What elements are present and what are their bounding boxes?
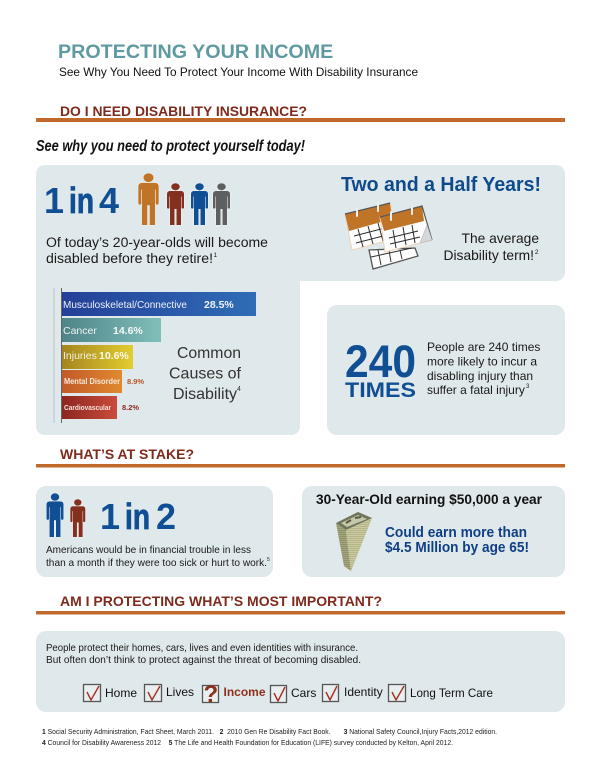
bar: musculoskeletal: Musculoskeletal/Connective — [63, 299, 187, 311]
heading: 30-year-old earning: 30-Year-Old earning $50,000 a year — [316, 491, 543, 507]
panel: what is most important — [36, 631, 565, 712]
check: identity — [322, 684, 383, 702]
title: PROTECTING YOUR INCOME — [58, 41, 333, 63]
check: home — [84, 684, 137, 702]
text: 240 times description: disabling injury than — [427, 369, 533, 383]
stat: 1 in 4: in — [69, 180, 94, 221]
text: average disability term: Disability term! — [444, 248, 534, 263]
text: 1 in 4 description — [46, 235, 268, 266]
footnotes: 1 Social Security Administration, Fact Sheet, March 2011. 2 2010 Gen Re Disability Fact Book. 3 National Safety Council,Injury Facts,2012 edition. — [42, 727, 497, 736]
heading: two and a half years: Two and a Half Years! — [341, 173, 541, 196]
section heading: am I protecting — [36, 593, 565, 614]
panel: earning potential — [302, 486, 565, 577]
text: average disability term — [444, 231, 539, 263]
stat: 240 times: 240 — [345, 336, 416, 387]
text: 1 in 4 description: disabled before they retire! — [46, 251, 213, 266]
stat: 240 times: TIMES — [345, 379, 416, 402]
text: 1 in 4 description: Of today’s 20-year-olds will become — [46, 235, 268, 250]
check: cars: Cars — [291, 686, 316, 700]
bar: cardiovascular: 8.2% — [122, 403, 139, 412]
text: 240 times description: 3 — [526, 384, 530, 390]
bar: mental disorder: 8.9% — [127, 377, 144, 386]
check: long term care — [388, 684, 493, 702]
footnotes — [42, 727, 497, 747]
back calendar — [369, 248, 418, 269]
text: 1 in 2 description: Americans would be in financial trouble in less — [46, 544, 251, 556]
stat: 1 in 2: in — [125, 496, 150, 537]
stat: 1 in 2 — [100, 496, 176, 537]
bar: mental disorder — [62, 370, 144, 393]
question mark: income — [202, 681, 266, 708]
bar: injuries — [62, 345, 133, 369]
footnotes: 4 Council for Disability Awareness 2012 5 The Life and Health Foundation for Education (LIFE) survey conducted by Kelton, April 2012. — [42, 738, 453, 747]
section heading: what's at stake — [36, 446, 565, 468]
check: identity: Identity — [344, 685, 383, 699]
text: 240 times description: People are 240 times — [427, 340, 540, 354]
text: 240 times description — [427, 340, 540, 397]
bar chart: common causes of disability — [54, 288, 256, 423]
icon: stack of money — [336, 512, 372, 571]
question mark: income: ? — [204, 681, 218, 708]
text: protect homes — [46, 642, 361, 666]
text: 1 in 2 description — [46, 544, 270, 569]
text: 240 times description: suffer a fatal injury — [427, 383, 525, 397]
stat: 1 in 4: 1 — [44, 180, 64, 221]
section heading: do I need disability insurance: DO I NEED DISABILITY INSURANCE? — [60, 103, 307, 119]
text: 240 times description: more likely to incur a — [427, 354, 537, 368]
stat: 1 in 4: 4 — [99, 180, 119, 221]
check: lives — [144, 684, 194, 702]
text: could earn: Could earn more than — [385, 525, 527, 541]
text: common causes of disability: Disability — [173, 386, 237, 403]
section heading: do I need disability insurance — [36, 103, 565, 122]
text: common causes of disability: Common — [177, 345, 241, 362]
panel: do I need background — [36, 165, 565, 435]
text: 1 in 4 description: 1 — [214, 252, 218, 259]
bar: mental disorder: Mental Disorder — [64, 377, 120, 386]
panel: 1 in 2 — [36, 486, 273, 577]
bar: musculoskeletal — [62, 292, 256, 316]
question mark: income: Income — [224, 685, 266, 699]
text: 1 in 2 description: than a month if they were too sick or hurt to work. — [46, 557, 267, 569]
text: common causes of disability: 4 — [237, 386, 241, 393]
panel: 240 times — [327, 305, 565, 435]
bar: cancer: 14.6% — [113, 325, 143, 337]
text: average disability term: The average — [462, 231, 539, 246]
text: common causes of disability: Causes of — [169, 366, 242, 382]
text: protect homes: People protect their homes, cars, lives and even identities with insurance. — [46, 642, 358, 654]
bar: cardiovascular: Cardiovascular — [64, 403, 111, 412]
stat: 1 in 2: 1 — [100, 496, 120, 537]
stat: 1 in 2: 2 — [156, 496, 176, 537]
section heading: what's at stake: WHAT’S AT STAKE? — [60, 446, 194, 462]
left calendar — [345, 203, 397, 250]
text: protect homes: But often don’t think to protect against the threat of becoming disabled. — [46, 654, 361, 666]
bar: cardiovascular — [62, 396, 139, 419]
check: home: Home — [105, 686, 137, 700]
bar: musculoskeletal: 28.5% — [204, 299, 234, 311]
bar: cancer: Cancer — [63, 325, 97, 337]
icon: two people — [46, 493, 85, 537]
icon: calendars — [345, 203, 432, 269]
text: could earn — [385, 525, 529, 556]
text: 1 in 2 description: 5 — [267, 557, 270, 563]
front calendar — [380, 206, 432, 252]
icon: four people, one highlighted — [138, 173, 230, 225]
text: average disability term: 2 — [535, 249, 539, 256]
text: could earn: $4.5 Million by age 65! — [385, 540, 529, 556]
check: lives: Lives — [166, 685, 194, 699]
check: long term care: Long Term Care — [410, 686, 493, 700]
bar: cancer — [62, 318, 161, 342]
checklist — [84, 681, 493, 708]
bar: injuries: 10.6% — [99, 350, 129, 362]
text: common causes of disability — [169, 345, 242, 403]
section heading: am I protecting: AM I PROTECTING WHAT’S MOST IMPORTANT? — [60, 593, 382, 609]
bar: injuries: Injuries — [63, 350, 97, 362]
tagline: See why you need to protect yourself today! — [36, 138, 306, 155]
stat: 1 in 4 — [44, 180, 119, 221]
subtitle: See Why You Need To Protect Your Income With Disability Insurance — [59, 65, 418, 79]
check: cars — [270, 686, 316, 702]
